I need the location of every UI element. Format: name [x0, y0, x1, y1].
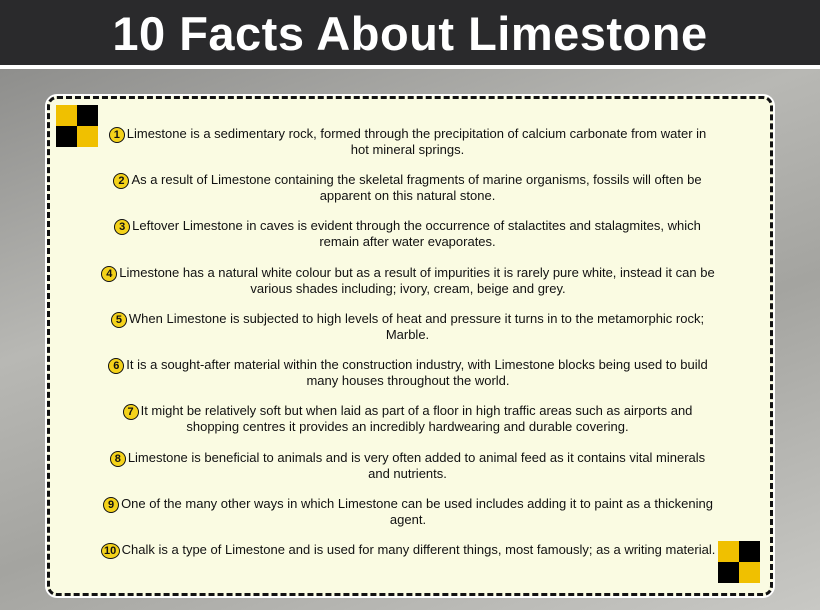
fact 6: It is a sought-after material within the construction industry, with Limestone blocks being used to build many houses throughout the world. — [126, 357, 708, 388]
fact 3: 3 — [119, 221, 125, 233]
fact 5: 5 — [116, 314, 122, 326]
header bar — [0, 0, 820, 65]
fact 1: 1 — [114, 129, 120, 141]
fact 1: Limestone is a sedimentary rock, formed through the precipitation of calcium carbonate from water in hot mineral springs. — [127, 126, 706, 157]
fact 2: As a result of Limestone containing the skeletal fragments of marine organisms, fossils will often be apparent on this natural stone. — [131, 172, 702, 203]
icon: squares bottom-right — [718, 541, 760, 583]
fact 10: 10 — [104, 545, 116, 557]
fact 9: 9 — [108, 499, 114, 511]
fact 8: 8 — [115, 453, 121, 465]
fact 3: Leftover Limestone in caves is evident through the occurrence of stalactites and stalagmites, which remain after water evaporates. — [132, 218, 701, 249]
fact 9: One of the many other ways in which Limestone can be used includes adding it to paint as a thickening agent. — [121, 496, 713, 527]
fact 8: Limestone is beneficial to animals and is very often added to animal feed as it contains vital minerals and nutrients. — [128, 450, 705, 481]
fact 4: Limestone has a natural white colour but as a result of impurities it is rarely pure white, instead it can be various shades including; ivory, cream, beige and grey. — [119, 265, 715, 296]
title: 10 Facts About Limestone — [112, 7, 708, 60]
fact 7: It might be relatively soft but when laid as part of a floor in high traffic areas such as airports and shopping centres it provides an incredibly hardwearing and durable covering. — [141, 403, 692, 434]
fact 4: 4 — [106, 268, 112, 280]
fact 7: 7 — [128, 406, 134, 418]
fact 5: When Limestone is subjected to high levels of heat and pressure it turns in to the metamorphic rock; Marble. — [129, 311, 704, 342]
fact 6: 6 — [113, 360, 119, 372]
fact 10: Chalk is a type of Limestone and is used for many different things, most famously; as a writing material. — [122, 542, 715, 557]
fact 2: 2 — [118, 175, 124, 187]
icon: squares top-left — [56, 105, 98, 147]
panel: facts — [47, 96, 773, 596]
